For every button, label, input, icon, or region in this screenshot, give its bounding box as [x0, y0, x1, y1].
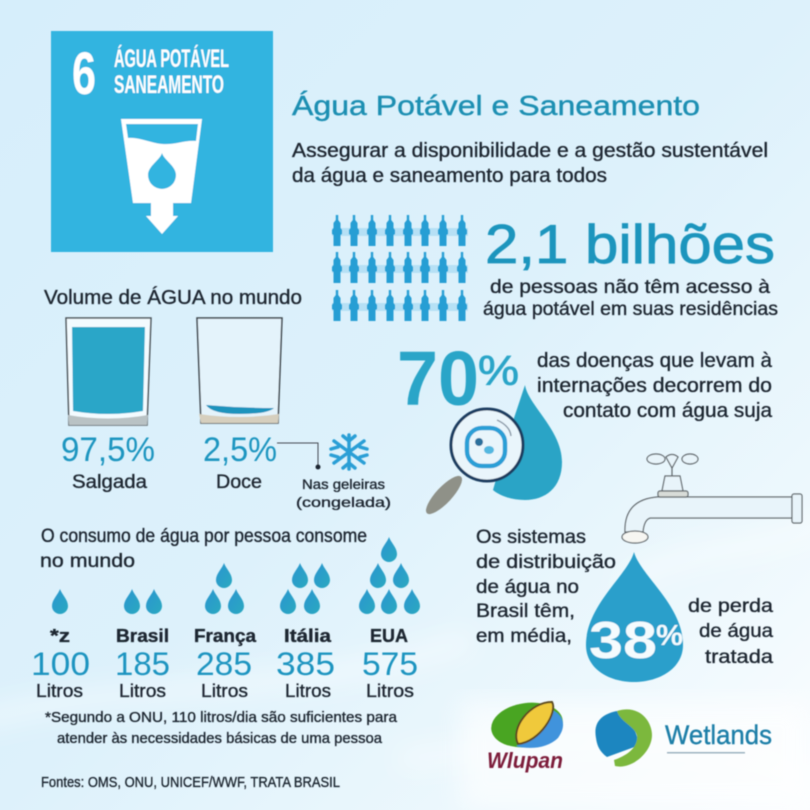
- units: [36, 681, 414, 701]
- values in litres: 185: [115, 646, 170, 682]
- heading: volume of water: Volume de ÁGUA no mundo: [44, 286, 302, 309]
- stat: 97,5% salt water: [61, 431, 155, 493]
- stat: 70%: %: [478, 347, 519, 394]
- callout line to glaciers: [277, 443, 320, 470]
- units: Litros: [36, 681, 83, 701]
- stat: 97,5% salt water: Salgada: [72, 472, 147, 493]
- footnote: *Segundo a ONU, 110 litros/dia são suficientes para: [45, 709, 398, 726]
- glaciers label: (congelada): [296, 494, 391, 510]
- units: Litros: [119, 681, 166, 701]
- logo: Wlupan: [487, 698, 566, 773]
- text: distribution systems: de água no: [476, 577, 579, 598]
- stat: 2,1 bilhões: 2,1 bilhões: [485, 213, 775, 275]
- stat caption: de pessoas não têm acesso à: [490, 277, 770, 298]
- country names: França: [194, 626, 257, 646]
- badge title: ÁGUA POTÁVEL: [114, 44, 229, 73]
- values in litres: 575: [362, 646, 418, 682]
- stat: 38%: [589, 612, 683, 670]
- 70% caption: contato com água suja: [563, 400, 773, 422]
- country names: *z: [50, 626, 70, 646]
- chart: drops per country: [52, 537, 420, 614]
- 70% caption: [537, 350, 773, 422]
- units: Litros: [201, 681, 248, 701]
- icon: glass with drop and arrow: [121, 119, 202, 234]
- 70% caption: internações decorrem do: [537, 375, 772, 397]
- badge title: SANEAMENTO: [114, 71, 224, 99]
- logo: Wetlands: [595, 709, 772, 767]
- text: distribution systems: de distribuição: [476, 552, 616, 573]
- text: loss of treated water: de perda: [688, 596, 773, 617]
- logo: Wlupan: Wlupan: [487, 748, 563, 773]
- subtitle text: [292, 140, 768, 187]
- country names: Brasil: [116, 626, 169, 646]
- units: Litros: [285, 681, 331, 701]
- country names: Itália: [284, 626, 332, 646]
- panel: SDG 6 badge: [51, 31, 273, 252]
- glaciers label: [296, 476, 391, 510]
- country names: [50, 626, 408, 646]
- values in litres: 285: [196, 646, 252, 682]
- badge number 6: 6: [72, 40, 96, 107]
- logo: Wetlands: Wetlands: [665, 720, 772, 750]
- footnote: atender às necessidades básicas de uma pessoa: [57, 730, 383, 747]
- stat: 2,5% fresh water: Doce: [216, 472, 262, 493]
- stat: 70%: 70: [397, 336, 479, 422]
- text: loss of treated water: tratada: [705, 647, 773, 668]
- footnote: [45, 709, 398, 747]
- values in litres: [31, 646, 418, 682]
- values in litres: 100: [31, 646, 90, 682]
- units: Litros: [366, 681, 414, 701]
- text: loss of treated water: de água: [699, 621, 773, 642]
- stat: 2,5% fresh water: 2,5%: [203, 431, 277, 469]
- icon: big drop with 38%: [586, 552, 683, 682]
- badge title: [114, 44, 229, 99]
- text: distribution systems: em média,: [476, 626, 572, 647]
- icon: fresh water glass: [197, 318, 282, 423]
- heading: consumption: [40, 526, 367, 572]
- text: loss of treated water: [688, 596, 773, 668]
- values in litres: 385: [276, 646, 335, 682]
- source: Fontes: OMS, ONU, UNICEF/WWF, TRATA BRASIL: [41, 774, 340, 791]
- text: distribution systems: Brasil têm,: [476, 601, 575, 622]
- text: distribution systems: [476, 527, 616, 647]
- icon: water tap: [622, 454, 802, 543]
- stat: 38%: 38: [589, 612, 657, 670]
- heading: consumption: no mundo: [40, 551, 135, 572]
- title: Água Potável e Saneamento: [292, 90, 700, 121]
- stat caption: água potável em suas residências: [483, 299, 778, 320]
- stat: 97,5% salt water: 97,5%: [61, 431, 155, 469]
- icon: salt water glass: [66, 318, 151, 425]
- stat: 38%: %: [656, 620, 683, 652]
- icon: drop with magnifying glass: [421, 385, 562, 519]
- stat: 2,5% fresh water: [203, 431, 277, 493]
- text: distribution systems: Os sistemas: [476, 527, 586, 548]
- subtitle text: da água e saneamento para todos: [292, 165, 607, 187]
- glaciers label: Nas geleiras: [302, 476, 385, 492]
- subtitle text: Assegurar a disponibilidade e a gestão sustentável: [292, 140, 768, 162]
- country names: EUA: [370, 626, 408, 646]
- icon: grid of people: [332, 215, 468, 321]
- stat caption: [483, 277, 778, 320]
- icon: snowflake: [331, 435, 367, 469]
- 70% caption: das doenças que levam à: [537, 350, 773, 372]
- heading: consumption: O consumo de água por pessoa consome: [41, 526, 367, 547]
